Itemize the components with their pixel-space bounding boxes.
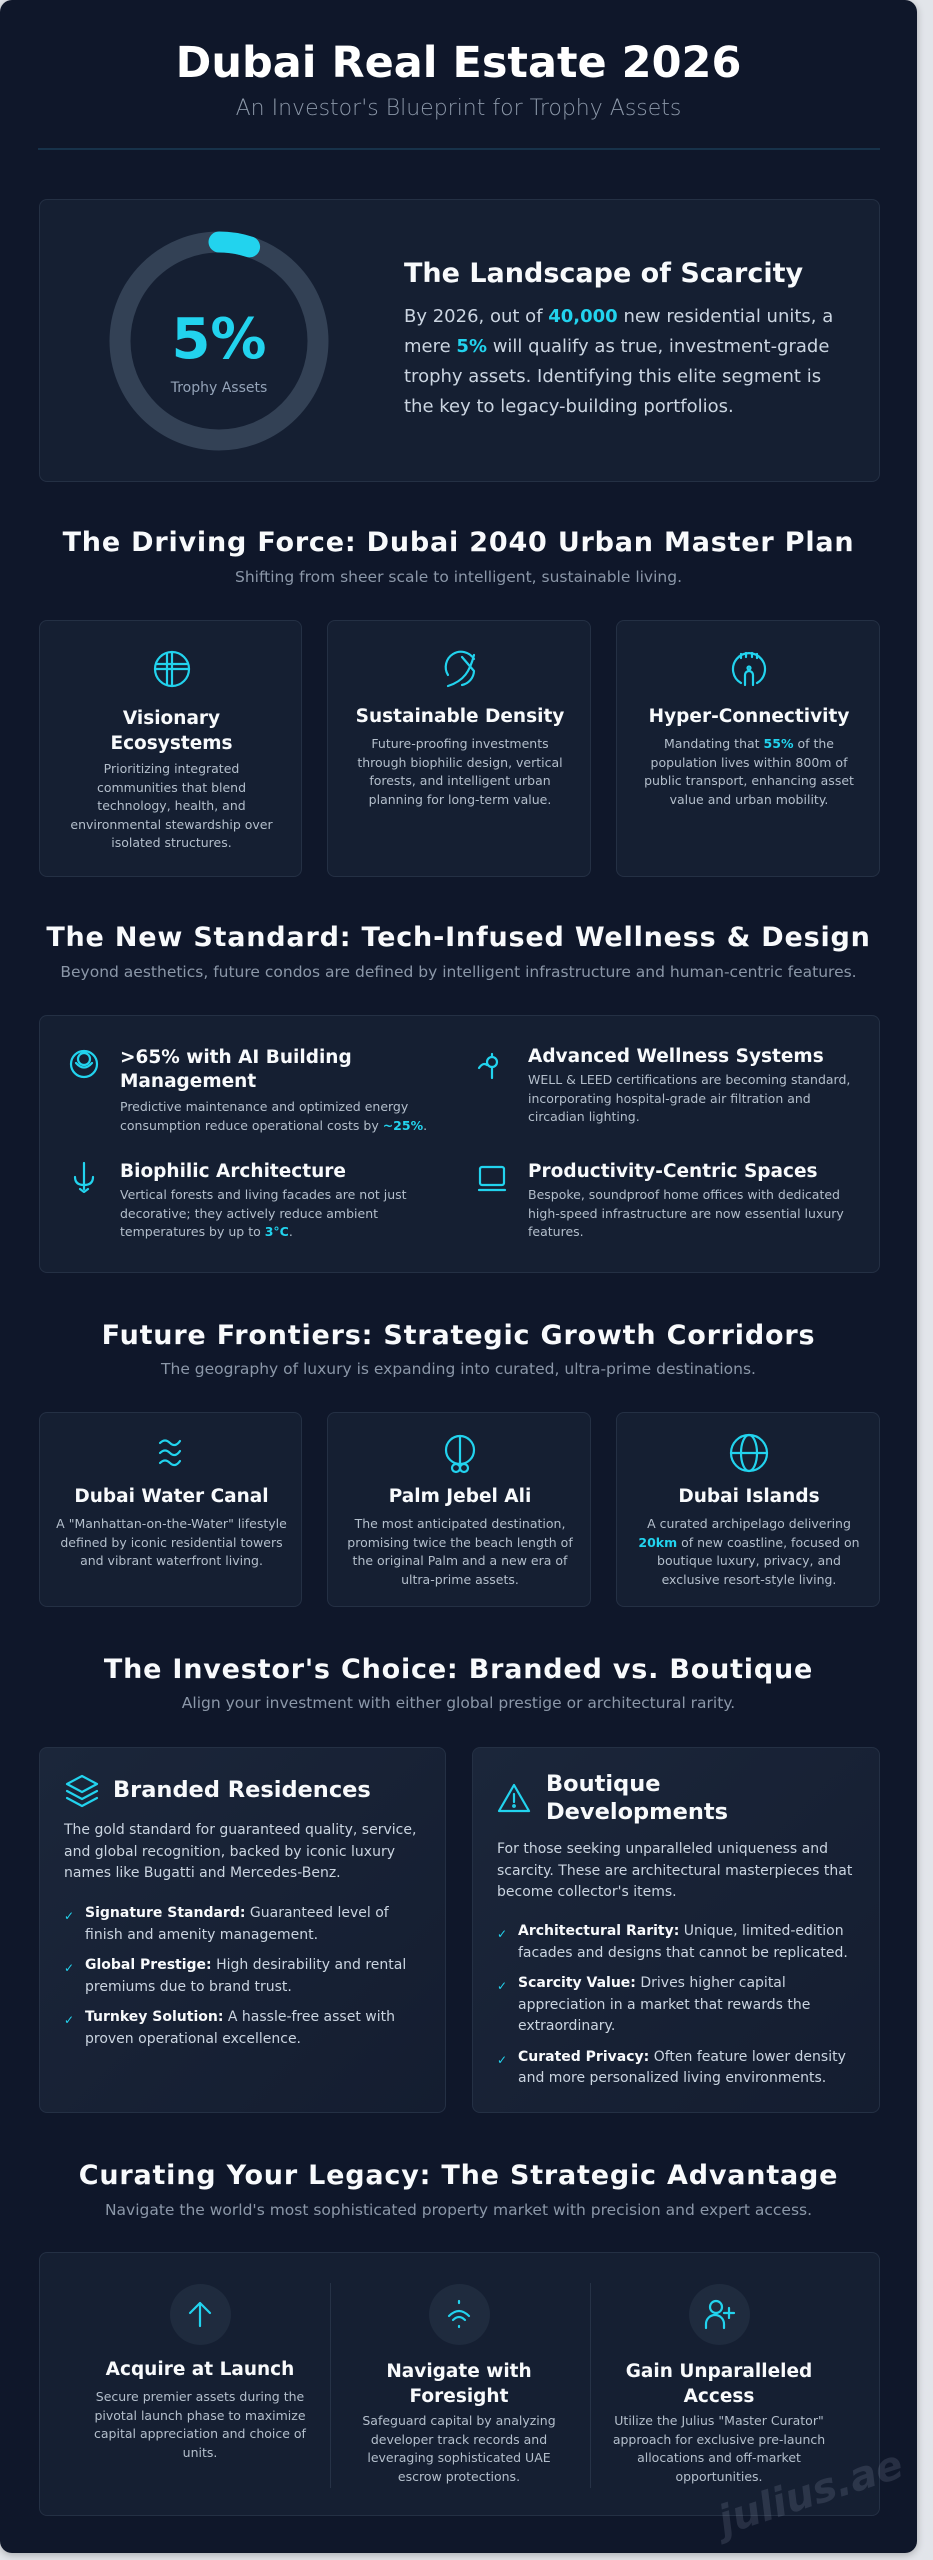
feature: biophilic architecture bbox=[74, 1161, 407, 1239]
step: navigate with foresight: Navigate with bbox=[386, 2361, 532, 2382]
subheading: curating your legacy: Navigate the world's most sophisticated property market with precision and expert access. bbox=[105, 2201, 812, 2219]
card: dubai islands: A curated archipelago delivering 20km of new coastline, focused on boutique luxury, privacy, and exclusive resort-style living. bbox=[638, 1516, 860, 1586]
step: navigate with foresight: Foresight bbox=[410, 2386, 508, 2407]
panel: landscape of scarcity bbox=[39, 199, 880, 482]
feature: AI building management bbox=[70, 1047, 427, 1132]
card: branded residences bbox=[39, 1747, 446, 2113]
card: boutique developments: Scarcity Value: Drives higher capital appreciation in a market that rewards the extraordinary. bbox=[518, 1975, 810, 2034]
feature: AI building management: >65% with AI Building Management bbox=[120, 1047, 352, 1092]
card: branded residences: The gold standard for guaranteed quality, service, and global recognition, backed by iconic luxury names like Bugatti and Mercedes-Benz. bbox=[64, 1822, 416, 1881]
feature: AI building management: Predictive maintenance and optimized energy consumption reduce operational costs by ~25%. bbox=[120, 1099, 427, 1132]
step: gain unparalleled access: Utilize the Julius "Master Curator" approach for exclusive pre-launch allocations and off-market opportunities. bbox=[613, 2413, 825, 2484]
card: dubai water canal bbox=[39, 1412, 302, 1607]
card: dubai water canal: A "Manhattan-on-the-Water" lifestyle defined by iconic residential towers and vibrant waterfront living. bbox=[56, 1516, 287, 1568]
step: navigate with foresight bbox=[362, 2284, 556, 2484]
icon: globe bbox=[730, 1434, 768, 1472]
heading: future frontiers: Future Frontiers: Strategic Growth Corridors bbox=[102, 1320, 815, 1351]
donut chart: 5% bbox=[110, 232, 328, 450]
feature: wellness systems: WELL & LEED certifications are becoming standard, incorporating hospital-grade air filtration and circadian lighting. bbox=[528, 1072, 850, 1124]
card: dubai water canal: Dubai Water Canal bbox=[74, 1486, 269, 1507]
panel: new standard features bbox=[39, 1015, 880, 1273]
heading: new standard: The New Standard: Tech-Infused Wellness & Design bbox=[46, 922, 871, 953]
heading: curating your legacy: Curating Your Legacy: The Strategic Advantage bbox=[79, 2160, 838, 2191]
subheading: new standard: Beyond aesthetics, future condos are defined by intelligent infrastructure and human-centric features. bbox=[60, 963, 857, 981]
card: branded residences: Branded Residences bbox=[113, 1777, 371, 1803]
donut chart: 5%: 5% bbox=[171, 307, 267, 372]
card: boutique developments bbox=[472, 1747, 880, 2113]
card: visionary ecosystems: Visionary bbox=[123, 708, 220, 729]
feature: productivity spaces bbox=[478, 1161, 844, 1239]
step: gain unparalleled access: Access bbox=[684, 2386, 754, 2407]
subheading: driving force: Shifting from sheer scale to intelligent, sustainable living. bbox=[235, 568, 682, 586]
step: acquire at launch bbox=[94, 2284, 306, 2460]
subheading: future frontiers: The geography of luxury is expanding into curated, ultra-prime destinations. bbox=[161, 1360, 756, 1378]
icon: palm bbox=[444, 1434, 476, 1474]
card: sustainable density: Sustainable Density bbox=[356, 706, 564, 727]
card: sustainable density bbox=[327, 620, 591, 877]
heading: landscape: The Landscape of Scarcity bbox=[404, 258, 803, 289]
donut chart: 5%: Trophy Assets bbox=[170, 380, 267, 396]
title: Dubai Real Estate 2026 bbox=[176, 38, 741, 88]
feature: wellness systems bbox=[478, 1046, 850, 1124]
card: branded residences: Turnkey Solution: A hassle-free asset with proven operational excellence. bbox=[85, 2009, 395, 2046]
feature: biophilic architecture: Biophilic Architecture bbox=[120, 1161, 346, 1182]
feature: biophilic architecture: Vertical forests and living facades are not just decorative; they actively reduce ambient temperatures by up to 3°C. bbox=[120, 1187, 407, 1239]
step: acquire at launch: Secure premier assets during the pivotal launch phase to maximize capital appreciation and choice of units. bbox=[94, 2389, 306, 2460]
panel: strategic advantage bbox=[39, 2252, 880, 2516]
card: boutique developments: Curated Privacy: Often feature lower density and more personalized living environments. bbox=[518, 2048, 846, 2086]
card: hyper-connectivity: Mandating that 55% of the population lives within 800m of public transport, enhancing asset value and urban mobility. bbox=[644, 736, 854, 806]
card: branded residences: Signature Standard: Guaranteed level of finish and amenity management. bbox=[85, 1905, 389, 1942]
step: gain unparalleled access: Gain Unparalleled bbox=[626, 2361, 812, 2382]
icon: leaf swirl bbox=[444, 650, 476, 688]
card: dubai islands: Dubai Islands bbox=[678, 1486, 820, 1507]
card: boutique developments: Boutique bbox=[546, 1771, 660, 1797]
card: palm jebel ali: Palm Jebel Ali bbox=[389, 1486, 531, 1507]
feature: productivity spaces: Productivity-Centric Spaces bbox=[528, 1161, 818, 1182]
text: landscape body: By 2026, out of 40,000 new residential units, a mere 5% will qualify as true, investment-grade trophy assets. Identifying this elite segment is the key to legacy-building portfolios. bbox=[404, 306, 833, 417]
card: visionary ecosystems: Prioritizing integrated communities that blend technology, health, and environmental stewardship over isolated structures. bbox=[70, 761, 273, 850]
icon: globe cross bbox=[154, 650, 190, 688]
step: gain unparalleled access bbox=[613, 2284, 825, 2484]
icon: layers bbox=[66, 1774, 98, 1808]
card: boutique developments: Architectural Rarity: Unique, limited-edition facades and designs that cannot be replicated. bbox=[518, 1923, 848, 1960]
card: branded residences: Global Prestige: High desirability and rental premiums due to brand trust. bbox=[85, 1957, 406, 1994]
subtitle: An Investor's Blueprint for Trophy Assets bbox=[236, 96, 681, 121]
heading: investor's choice: The Investor's Choice: Branded vs. Boutique bbox=[104, 1654, 813, 1685]
watermark: julius.ae bbox=[713, 2442, 909, 2544]
card: palm jebel ali bbox=[327, 1412, 591, 1607]
card: hyper-connectivity bbox=[616, 620, 880, 877]
card: palm jebel ali: The most anticipated destination, promising twice the beach length of the original Palm and a new era of ultra-prime assets. bbox=[347, 1516, 573, 1586]
heading: driving force: The Driving Force: Dubai 2040 Urban Master Plan bbox=[63, 527, 854, 558]
card: sustainable density: Future-proofing investments through biophilic design, vertical forests, and intelligent urban planning for long-term value. bbox=[357, 736, 563, 806]
subheading: investor's choice: Align your investment with either global prestige or architectural rarity. bbox=[182, 1694, 735, 1712]
card: visionary ecosystems: Ecosystems bbox=[110, 733, 233, 754]
step: navigate with foresight: Safeguard capital by analyzing developer track records and leveraging sophisticated UAE escrow protections. bbox=[362, 2413, 556, 2484]
feature: productivity spaces: Bespoke, soundproof home offices with dedicated high-speed infrastructure are now essential luxury features. bbox=[528, 1187, 844, 1239]
step: acquire at launch: Acquire at Launch bbox=[106, 2359, 294, 2380]
card: dubai islands bbox=[616, 1412, 880, 1607]
card: boutique developments: Developments bbox=[546, 1799, 728, 1825]
card: hyper-connectivity: Hyper-Connectivity bbox=[649, 706, 849, 727]
card: boutique developments: For those seeking unparalleled uniqueness and scarcity. These are architectural masterpieces that become collector's items. bbox=[497, 1841, 852, 1900]
icon: waves bbox=[158, 1439, 182, 1466]
icon: warning triangle bbox=[498, 1784, 530, 1812]
icon: transit bbox=[732, 652, 766, 686]
card: visionary ecosystems bbox=[39, 620, 302, 877]
feature: wellness systems: Advanced Wellness Systems bbox=[528, 1046, 824, 1067]
